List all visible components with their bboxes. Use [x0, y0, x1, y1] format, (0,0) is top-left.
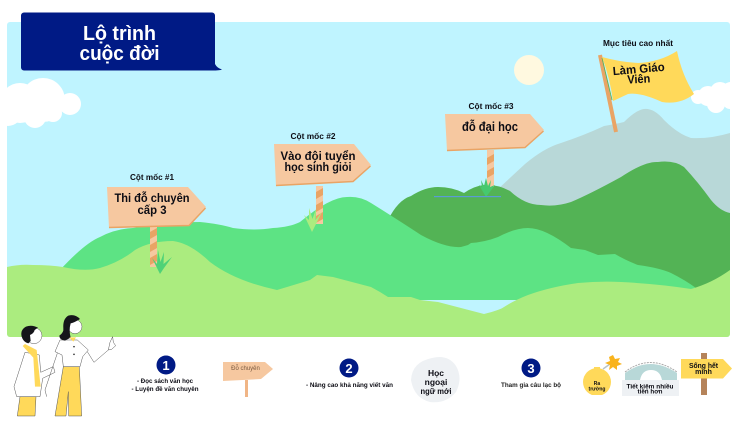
- step 1 text: - Luyện đề văn chuyên: [132, 384, 199, 393]
- sign: live fully: [681, 353, 732, 395]
- milestone 1: [107, 172, 206, 274]
- panel: landscape background: [7, 22, 741, 337]
- icon: bomb: [583, 355, 622, 396]
- milestone 3: [434, 101, 544, 197]
- icon: bomb: trường: [589, 386, 605, 392]
- step 3 badge: [522, 358, 540, 378]
- goal flag: Mục tiêu cao nhất: [603, 38, 673, 48]
- blob: foreign language: ngữ mới: [420, 386, 452, 396]
- step 2 badge: 2: [345, 361, 353, 376]
- step 1 badge: 1: [162, 358, 170, 373]
- goal flag: [600, 38, 694, 132]
- step 1 badge: [156, 356, 176, 374]
- icon: bridge: [622, 362, 679, 396]
- title banner: Lộ trình: [83, 23, 156, 45]
- milestone 1: Cột mốc #1: [130, 172, 174, 182]
- title banner: [21, 12, 222, 70]
- step 2 text: - Nâng cao khả năng viết văn: [306, 381, 393, 389]
- milestone 2: [274, 131, 371, 232]
- milestone 2: Vào đội tuyển: [280, 149, 356, 163]
- step 1 text: [132, 378, 199, 393]
- small sign: Đỗ chuyên: [231, 365, 260, 372]
- grey mountain: [500, 108, 730, 213]
- light green foreground hill: [7, 241, 730, 337]
- icon: right cloud: [691, 82, 730, 113]
- step 3 badge: 3: [527, 361, 535, 376]
- step 3 text: Tham gia câu lạc bộ: [501, 382, 561, 389]
- milestone 2: Cột mốc #2: [290, 131, 336, 141]
- milestone 1: cấp 3: [138, 203, 167, 217]
- icon: sun: [514, 55, 544, 85]
- icon: bridge: tiền hơn: [638, 386, 663, 396]
- goal flag: Làm Giáo: [612, 60, 665, 78]
- small sign: [223, 362, 273, 397]
- dark green hill: [388, 162, 730, 290]
- man: [14, 326, 55, 416]
- goal flag: Viên: [627, 71, 651, 87]
- woman: [45, 315, 116, 416]
- icon: left cloud: [0, 78, 81, 128]
- blob: foreign language: [411, 357, 460, 402]
- icon: bridge: Tiết kiệm nhiều: [626, 382, 674, 390]
- milestone 3: Cột mốc #3: [468, 101, 514, 111]
- step 2 badge: [340, 358, 358, 378]
- icon: bomb: Ra: [594, 381, 600, 387]
- mid green hill: [60, 197, 696, 300]
- milestone 2: học sinh giỏi: [284, 160, 352, 174]
- step 1 text: - Đọc sách văn học: [137, 378, 193, 385]
- blob: foreign language: ngoại: [425, 377, 447, 387]
- sign: live fully: Sống hết: [689, 362, 719, 370]
- title banner: cuộc đời: [80, 43, 160, 65]
- illustration: two people: [14, 315, 116, 416]
- sign: live fully: mình: [695, 369, 712, 376]
- milestone 3: đỗ đại học: [462, 119, 518, 134]
- blob: foreign language: Học: [428, 368, 444, 378]
- milestone 1: Thi đỗ chuyên: [114, 190, 190, 205]
